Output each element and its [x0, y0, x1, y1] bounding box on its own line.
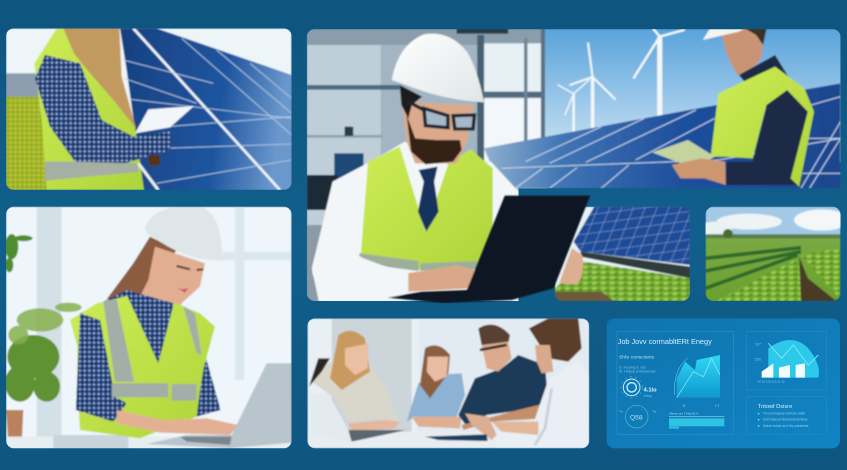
white hard hat — [145, 207, 224, 261]
dashboard card: bar and pie chart: 250 — [755, 358, 761, 362]
dashboard card: job summary: S. Incomg Il. oss — [619, 365, 646, 369]
hair — [107, 237, 177, 299]
worker 2: lime vest — [711, 67, 814, 187]
sky — [545, 29, 841, 162]
worker 1: lime vest — [360, 147, 493, 270]
table — [6, 437, 292, 450]
person 2: woman in blue shirt — [407, 345, 465, 428]
worker: long blond hair — [63, 28, 136, 128]
ring icon: Tls — [619, 409, 623, 413]
worker 1: white hard hat — [392, 34, 484, 102]
area chart: 11 — [682, 404, 686, 408]
plant and pot — [5, 234, 82, 438]
worker 1: reflective strip — [358, 253, 477, 271]
laptop — [147, 363, 292, 448]
panel: main solar site scene — [307, 29, 847, 305]
worker 2: hands — [672, 158, 726, 185]
panel: team meeting around a table — [307, 318, 589, 448]
bar table: Hlemo om 1 Hse 01 5 — [669, 411, 699, 415]
ring icon: Q58 — [630, 414, 643, 421]
safety vest — [70, 296, 215, 438]
face and neck — [140, 246, 206, 306]
worker 2: tablet — [652, 140, 715, 168]
solar array — [120, 28, 292, 190]
table — [307, 432, 589, 448]
clipboard paper — [135, 106, 194, 133]
panel: data dashboard — [607, 318, 840, 448]
worker 1: shirt — [312, 142, 520, 302]
worker: plaid sleeve — [35, 55, 171, 168]
dashboard card: job summary: Shfe conscionts — [619, 354, 655, 360]
plaid shirt — [76, 290, 221, 420]
worker 2: white hat brim — [703, 29, 744, 40]
dashboard card: bullet list: Tntowf Dsisre — [758, 404, 792, 410]
worker 2: dark jacket — [725, 55, 808, 185]
ring icon: Tls — [652, 409, 657, 413]
worker 1: neck and face — [401, 102, 474, 163]
worker 1: tie — [418, 167, 439, 232]
dashboard card: bar and pie chart: 10 10 100 110 11 10 — [758, 380, 785, 384]
wind turbines — [558, 29, 684, 131]
dashboard card: bullet list: Mctort trntse and ths plarsiteas — [763, 424, 809, 428]
laptop — [309, 393, 408, 442]
solar array — [484, 83, 841, 188]
area chart — [674, 355, 720, 408]
worker 1: glasses — [408, 102, 474, 129]
gauge icon — [621, 377, 642, 398]
inset: green field under cloudy sky — [698, 207, 847, 302]
area chart: 1 3 — [715, 404, 719, 408]
worker 1: beard — [407, 115, 462, 164]
reflective strip — [45, 162, 139, 181]
panel: woman in hard hat with laptop — [5, 207, 292, 450]
worker: safety vest — [34, 28, 144, 190]
dashboard title: Job Jovv cormabltERt Enegy — [618, 337, 712, 346]
laptop — [388, 196, 590, 303]
dashboard card: bullet list: Tll cormmasse trantuis ciatsl — [763, 412, 805, 416]
person 3: man in dark shirt — [458, 325, 548, 430]
panel: woman with clipboard at solar panel — [6, 28, 292, 190]
worker 1: hands — [408, 265, 481, 292]
reflective strips — [103, 299, 202, 401]
dashboard card: bar and pie chart: 107 — [755, 343, 761, 347]
person 4: man in white shirt from behind — [465, 318, 589, 448]
office interior — [307, 29, 548, 305]
ring icon — [619, 405, 657, 428]
plaid sleeve — [76, 313, 127, 422]
dashboard card: bullet list: Sulf matenet tlamcestmentsas — [763, 418, 808, 422]
worker 1: arms and laptop in front — [313, 196, 590, 303]
dashboard card: job summary: 4.1lo — [644, 388, 657, 394]
dashboard card: job summary — [617, 332, 734, 434]
dashboard card: job summary: Irrtng — [644, 394, 652, 398]
worker 1: forearm — [560, 248, 583, 284]
dashboard card: bullet list — [747, 397, 827, 434]
dashboard card: job summary: III. Hhpoe & Bssoenas — [619, 369, 656, 373]
worker 2: neck and face — [720, 29, 765, 75]
inset: solar panels on grass — [555, 207, 690, 302]
arm and hand — [117, 410, 238, 435]
dashboard card: bar and pie chart — [747, 332, 827, 390]
person 1: blonde woman — [309, 331, 400, 432]
